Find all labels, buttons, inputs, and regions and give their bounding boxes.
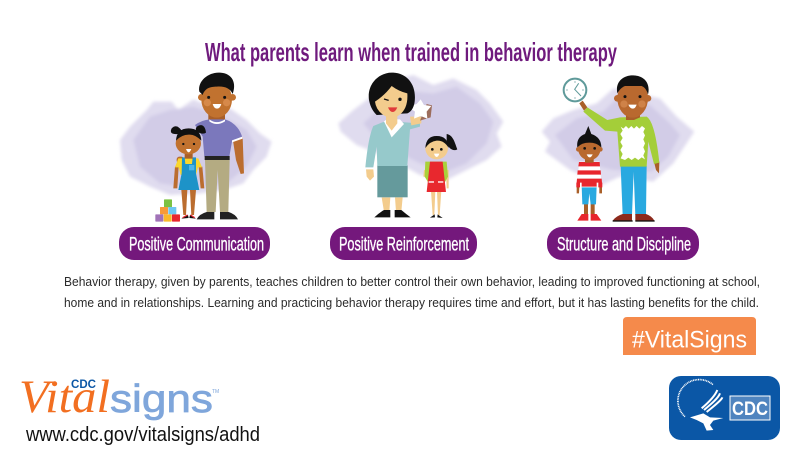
icon: HHS seal [678,380,723,431]
logo: CDC Vital Signs: CDC [71,379,96,391]
label: positive communication [119,227,270,260]
watercolor blob [120,99,272,195]
watercolor blob [542,88,694,185]
url: www.cdc.gov/vitalsigns/adhd [25,423,260,446]
logo: CDC Vital Signs [19,371,219,423]
logo: HHS and CDC [669,376,780,440]
icon: mother and daughter [365,73,457,218]
watercolor blob [338,75,503,180]
body text: home and in relationships. Learning and practicing behavior therapy requires time and effort, but it has lasting benefits for the child. [64,295,759,310]
panel: structure and discipline [542,75,699,260]
icon: toy blocks [155,199,180,222]
icon: father with clock and son [564,75,659,222]
panel: positive reinforcement [330,73,503,260]
logo: CDC Vital Signs: signs [110,378,213,421]
icon: CDC mark: CDC [732,399,768,420]
label: structure and discipline: Structure and Discipline [557,234,691,256]
label: positive communication: Positive Communication [129,234,264,256]
icon: father and daughter [171,73,244,219]
label: structure and discipline [547,227,699,260]
body text: Behavior therapy, given by parents, teaches children to better control their own behavior, leading to improved functioning at school, [64,274,760,289]
logo: CDC Vital Signs: Vital [19,371,110,423]
panel: positive communication [119,73,272,260]
logo: CDC Vital Signs: TM [212,389,219,395]
body text [64,274,760,310]
hashtag badge: #VitalSigns [632,326,747,354]
hashtag badge [623,317,756,355]
label: positive reinforcement [330,227,477,260]
label: positive reinforcement: Positive Reinforcement [339,234,469,256]
